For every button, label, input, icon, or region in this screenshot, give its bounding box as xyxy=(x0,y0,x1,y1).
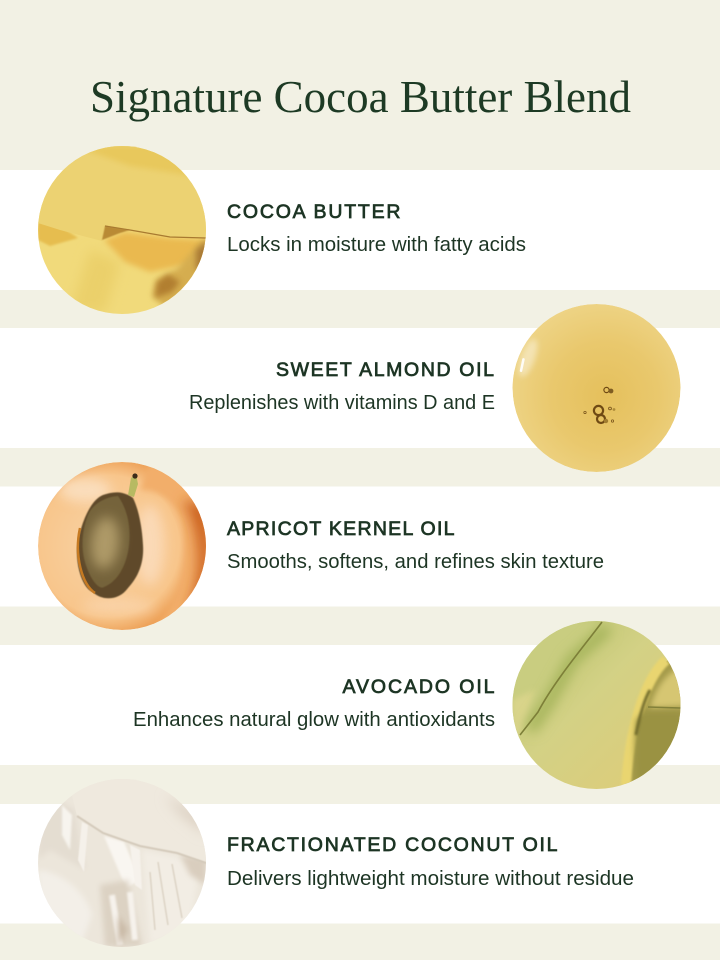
icon: apricot photo xyxy=(38,462,210,630)
description: Enhances natural glow with antioxidants xyxy=(133,709,495,731)
icon: avocado photo xyxy=(512,621,690,791)
panel: fractionated coconut oil xyxy=(0,779,720,947)
description: Delivers lightweight moisture without residue xyxy=(227,868,634,890)
description: Locks in moisture with fatty acids xyxy=(227,234,526,256)
icon: cocoa butter photo xyxy=(38,146,208,314)
panel: apricot kernel oil xyxy=(0,462,720,630)
title: Signature Cocoa Butter Blend xyxy=(90,71,631,122)
icon: coconut oil photo xyxy=(38,779,206,947)
panel: avocado oil xyxy=(0,621,720,791)
heading: FRACTIONATED COCONUT OIL xyxy=(227,834,558,856)
icon: almond oil drop photo xyxy=(512,304,680,472)
heading: SWEET ALMOND OIL xyxy=(276,359,494,381)
description: Smooths, softens, and refines skin texture xyxy=(227,551,604,573)
panel: sweet almond oil xyxy=(0,304,720,472)
heading: AVOCADO OIL xyxy=(342,676,495,698)
description: Replenishes with vitamins D and E xyxy=(189,392,495,414)
panel: cocoa butter xyxy=(0,146,720,314)
heading: APRICOT KERNEL OIL xyxy=(227,518,455,540)
heading: COCOA BUTTER xyxy=(227,201,400,223)
